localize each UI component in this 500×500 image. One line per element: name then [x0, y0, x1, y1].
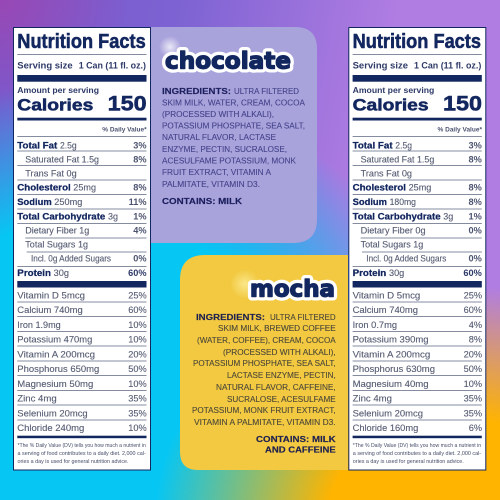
chocolate ingredients text: ENZYME, PECTIN, SUCRALOSE,	[162, 145, 287, 154]
macronutrient rows: 250mg	[54, 197, 82, 207]
calories	[17, 85, 147, 134]
serving size: Serving size	[353, 60, 408, 70]
vitamins and minerals rows: Potassium 390mg	[353, 334, 429, 346]
macronutrient rows: 30g	[389, 268, 404, 278]
footnote: a serving of food contributes to a daily diet. 2,000 cal-	[18, 451, 146, 457]
vitamins and minerals rows: Chloride 240mg	[17, 423, 84, 434]
macronutrient rows: 2.5g	[395, 140, 412, 150]
macronutrient rows: 3%	[133, 140, 146, 150]
macronutrient rows: Total Fat	[17, 140, 57, 150]
chocolate allergen note: CONTAINS: MILK	[162, 197, 242, 206]
macronutrient rows: Saturated Fat 1.5g	[25, 154, 99, 164]
mocha heading: mocha	[250, 276, 335, 302]
panel: chocolate nutrition facts	[14, 28, 150, 470]
mocha ingredients text: INGREDIENTS:	[196, 313, 265, 322]
vitamins and minerals rows: 10%	[128, 334, 147, 344]
macronutrient rows: 2.5g	[60, 140, 77, 150]
macronutrient rows: 8%	[469, 182, 482, 192]
chocolate ingredients text: (PROCESSED WITH ALKALI),	[162, 110, 274, 119]
vitamins and minerals rows: Zinc 4mg	[17, 394, 57, 404]
vitamins and minerals rows	[353, 290, 482, 438]
macronutrient rows: 8%	[469, 197, 482, 207]
macronutrient rows: 25mg	[409, 182, 431, 192]
mocha allergen note: CONTAINS: MILK	[256, 435, 336, 444]
macronutrient rows: 3%	[469, 140, 482, 150]
calories: 150	[108, 92, 147, 116]
calories: Amount per serving	[353, 85, 434, 95]
mocha ingredients text: VITAMIN A PALMITATE, VITAMIN D3.	[194, 418, 336, 427]
macronutrient rows: 30g	[54, 268, 69, 278]
vitamins and minerals rows: Zinc 4mg	[353, 394, 392, 404]
vitamins and minerals rows: Vitamin A 200mcg	[17, 350, 95, 360]
macronutrient rows: 4%	[133, 226, 146, 236]
footnote: *The % Daily Value (DV) tells you how much a nutrient in	[18, 443, 146, 449]
macronutrient rows: 1%	[469, 212, 482, 222]
calories: % Daily Value*	[438, 126, 482, 134]
serving size: Serving size	[17, 60, 73, 70]
serving size	[353, 54, 482, 82]
vitamins and minerals rows: Iron 1.9mg	[17, 320, 61, 331]
calories: Calories	[353, 96, 429, 115]
macronutrient rows: Dietary Fiber 1g	[25, 226, 89, 236]
mocha ingredients text: ULTRA FILTERED	[270, 313, 336, 322]
panel: chocolate ingredients	[150, 27, 317, 243]
mocha ingredients text: SKIM MILK, BREWED COFFEE	[218, 324, 336, 333]
calories: Amount per serving	[17, 85, 99, 95]
vitamins and minerals rows: Vitamin A 200mcg	[353, 350, 430, 360]
vitamins and minerals rows: 35%	[128, 394, 147, 404]
chocolate ingredients text	[162, 87, 306, 189]
nutrition facts title: Nutrition Facts	[353, 31, 481, 53]
vitamins and minerals rows: 20%	[464, 350, 482, 360]
mocha ingredients text: (WATER, COFFEE), CREAM, COCOA	[197, 336, 337, 345]
mocha heading: mocha	[250, 276, 335, 302]
vitamins and minerals rows: 4%	[469, 320, 482, 330]
nutrition facts title: Nutrition Facts	[17, 31, 146, 53]
vitamins and minerals rows: 35%	[128, 408, 147, 418]
vitamins and minerals rows: Phosphorus 650mg	[17, 364, 99, 375]
macronutrient rows: 180mg	[390, 197, 416, 207]
macronutrient rows: Total Sugars 1g	[361, 240, 423, 250]
calories: 150	[443, 92, 482, 116]
mocha ingredients text: LACTASE ENZYME, PECTIN,	[227, 371, 336, 380]
macronutrient rows: 8%	[133, 182, 146, 192]
vitamins and minerals rows: Potassium 470mg	[17, 334, 92, 346]
macronutrient rows: 60%	[128, 268, 146, 278]
panel: mocha nutrition facts	[349, 28, 486, 470]
vitamins and minerals rows: Chloride 160mg	[353, 423, 418, 434]
macronutrient rows: 1%	[133, 212, 146, 222]
calories: Calories	[17, 96, 93, 115]
chocolate ingredients text: ACESULFAME POTASSIUM, MONK	[162, 156, 297, 166]
footnote	[353, 443, 481, 465]
vitamins and minerals rows: 6%	[469, 423, 482, 433]
vitamins and minerals rows: 20%	[128, 350, 147, 360]
chocolate ingredients text: ULTRA FILTERED	[234, 87, 299, 96]
vitamins and minerals rows: 50%	[464, 364, 482, 374]
vitamins and minerals rows: Selenium 20mcg	[17, 408, 88, 420]
macronutrient rows: Dietary Fiber 0g	[361, 226, 426, 236]
macronutrient rows: Trans Fat 0g	[25, 168, 77, 178]
vitamins and minerals rows: Vitamin D 5mcg	[17, 290, 85, 302]
macronutrient rows: Protein	[353, 268, 386, 278]
macronutrient rows: Total Carbohydrate	[17, 212, 105, 222]
vitamins and minerals rows: 35%	[464, 408, 482, 418]
macronutrient rows: Total Sugars 1g	[25, 240, 88, 250]
macronutrient rows: 3g	[108, 212, 118, 222]
macronutrient rows: Sodium	[353, 197, 387, 207]
vitamins and minerals rows: Magnesium 50mg	[17, 379, 93, 390]
vitamins and minerals rows: Iron 0.7mg	[353, 320, 397, 331]
chocolate heading: chocolate	[165, 48, 291, 74]
mocha allergen note	[256, 435, 336, 454]
macronutrient rows: Protein	[17, 268, 51, 278]
chocolate ingredients text: SKIM MILK, WATER, CREAM, COCOA	[162, 98, 306, 108]
macronutrient rows: 3g	[443, 212, 453, 222]
macronutrient rows	[17, 136, 146, 288]
footnote: a serving of food contributes to a daily diet. 2,000 cal-	[353, 451, 481, 457]
macronutrient rows: Incl. 0g Added Sugars	[366, 254, 447, 264]
vitamins and minerals rows: 8%	[469, 334, 482, 344]
vitamins and minerals rows: 50%	[128, 364, 147, 374]
mocha ingredients text: NATURAL FLAVOR, CAFFEINE,	[216, 383, 336, 392]
footnote: *The % Daily Value (DV) tells you how much a nutrient in	[353, 443, 481, 449]
macronutrient rows: 8%	[133, 154, 146, 164]
vitamins and minerals rows: Selenium 20mcg	[353, 408, 423, 420]
serving size: 1 Can (11 fl. oz.)	[414, 60, 481, 70]
macronutrient rows: 0%	[133, 254, 146, 264]
chocolate ingredients text: FRUIT EXTRACT, VITAMIN A	[162, 168, 272, 177]
vitamins and minerals rows: 10%	[464, 379, 482, 389]
vitamins and minerals rows: 10%	[128, 320, 147, 330]
macronutrient rows: 25mg	[73, 182, 96, 192]
vitamins and minerals rows: 35%	[464, 394, 482, 404]
vitamins and minerals rows: Calcium 740mg	[353, 305, 418, 316]
footnote	[18, 443, 146, 465]
macronutrient rows: Total Fat	[353, 140, 393, 150]
macronutrient rows: 8%	[469, 154, 482, 164]
chocolate ingredients text: POTASSIUM PHOSPHATE, SEA SALT,	[162, 122, 305, 130]
chocolate ingredients text: PALMITATE, VITAMIN D3.	[162, 180, 260, 189]
vitamins and minerals rows: Magnesium 40mg	[353, 379, 429, 390]
panel: mocha ingredients	[180, 255, 348, 470]
vitamins and minerals rows	[17, 290, 147, 438]
mocha ingredients text: POTASSIUM PHOSPHATE, SEA SALT,	[193, 359, 336, 368]
macronutrient rows: 0%	[469, 254, 482, 264]
macronutrient rows: 11%	[129, 197, 146, 207]
vitamins and minerals rows: 25%	[128, 290, 147, 300]
chocolate ingredients text: INGREDIENTS:	[162, 87, 231, 96]
vitamins and minerals rows: 25%	[464, 290, 482, 300]
vitamins and minerals rows: Phosphorus 630mg	[353, 364, 435, 375]
serving size	[17, 54, 146, 82]
vitamins and minerals rows: 10%	[128, 423, 147, 433]
macronutrient rows: Cholesterol	[353, 182, 406, 192]
vitamins and minerals rows: 60%	[128, 305, 147, 315]
vitamins and minerals rows: Vitamin D 5mcg	[353, 290, 420, 302]
mocha ingredients text: SUCRALOSE, ACESULFAME	[227, 395, 336, 404]
macronutrient rows: 60%	[463, 268, 482, 278]
mocha ingredients text	[192, 313, 337, 427]
macronutrient rows: Trans Fat 0g	[361, 168, 412, 178]
vitamins and minerals rows: 60%	[464, 305, 482, 315]
serving size: 1 Can (11 fl. oz.)	[79, 60, 146, 70]
macronutrient rows	[353, 136, 482, 288]
vitamins and minerals rows: 10%	[128, 379, 147, 389]
chocolate ingredients text: NATURAL FLAVOR, LACTASE	[162, 133, 276, 142]
footnote: ories a day is used for general nutrition advice.	[353, 459, 464, 465]
macronutrient rows: Total Carbohydrate	[353, 212, 441, 222]
vitamins and minerals rows: Calcium 740mg	[17, 305, 83, 316]
mocha allergen note: AND CAFFEINE	[265, 446, 336, 454]
calories: % Daily Value*	[102, 126, 147, 134]
calories	[353, 85, 482, 134]
footnote: ories a day is used for general nutrition advice.	[18, 459, 128, 465]
chocolate heading: chocolate	[165, 48, 291, 74]
mocha ingredients text: POTASSIUM, MONK FRUIT EXTRACT,	[192, 406, 336, 415]
macronutrient rows: Saturated Fat 1.5g	[361, 154, 434, 164]
macronutrient rows: Incl. 0g Added Sugars	[31, 254, 111, 264]
macronutrient rows: Sodium	[17, 197, 52, 207]
mocha ingredients text: (PROCESSED WITH ALKALI),	[223, 348, 336, 357]
macronutrient rows: Cholesterol	[17, 182, 71, 192]
macronutrient rows: 0%	[469, 226, 482, 236]
